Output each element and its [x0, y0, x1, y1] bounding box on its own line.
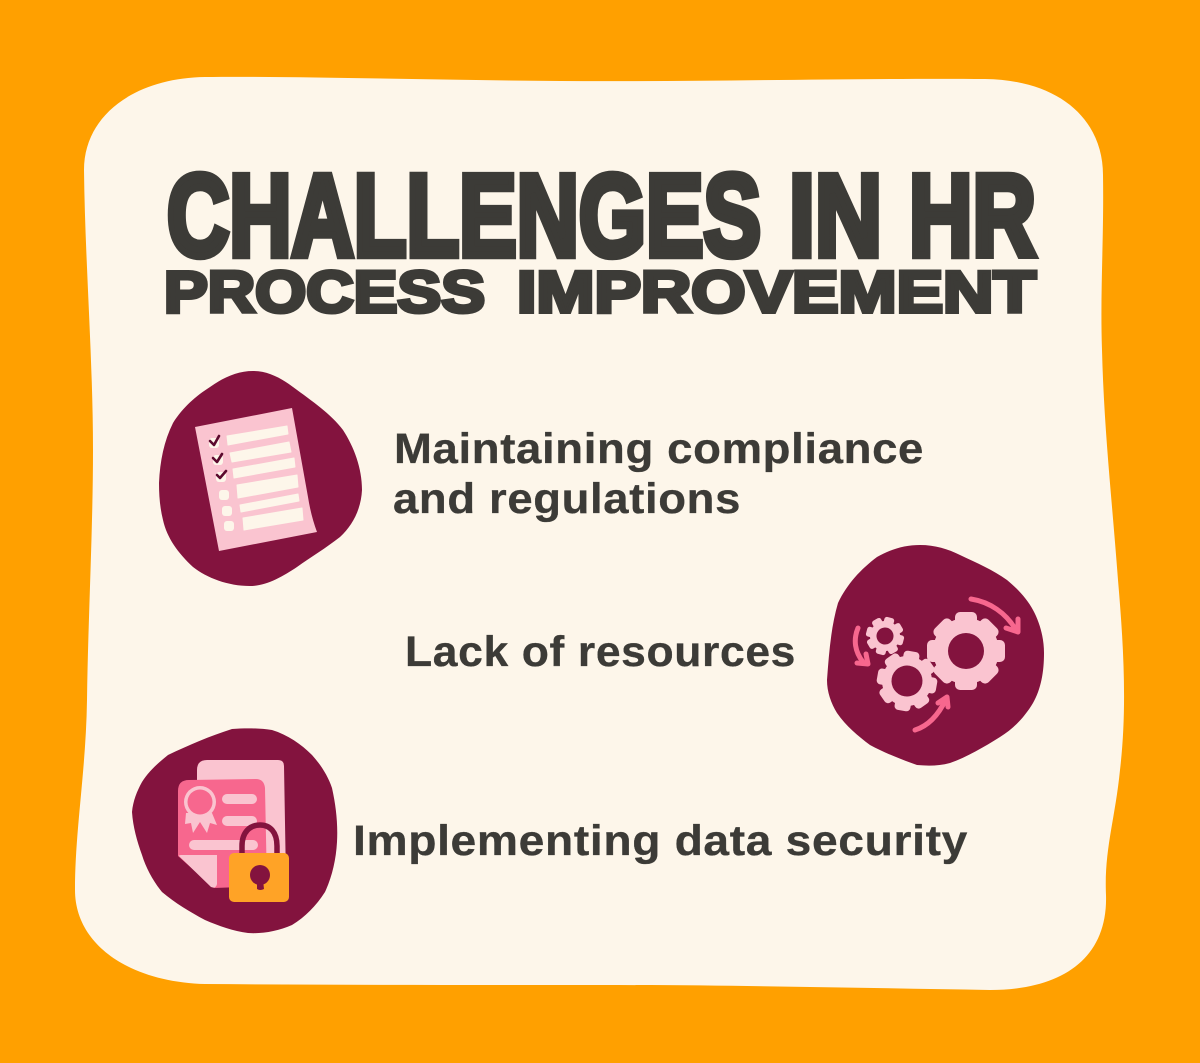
text: resources: Lack of resources [405, 628, 796, 676]
padlock body [229, 853, 289, 902]
blob [132, 728, 337, 933]
certificate lines [189, 794, 258, 850]
check marks [210, 436, 226, 478]
title line 1: IN [789, 150, 882, 280]
line 1: Maintaining compliance [394, 425, 924, 473]
keyhole [250, 865, 270, 890]
certificate page [178, 779, 267, 888]
line 2: and regulations [393, 475, 741, 523]
title line 2: PROCESS [164, 260, 485, 325]
icon: locked document [132, 728, 337, 933]
blob [827, 545, 1044, 766]
text rows [227, 426, 303, 530]
small gear [862, 613, 908, 659]
title line 1: HR [909, 150, 1036, 280]
icon: gears [827, 545, 1044, 766]
paper [195, 408, 317, 551]
title line 1: CHALLENGES [167, 150, 761, 280]
title line 2: IMPROVEMENT [517, 260, 1036, 325]
large gear [927, 612, 1005, 690]
back page [197, 760, 286, 884]
padlock shackle [242, 825, 277, 855]
check boxes [209, 438, 234, 531]
blob [159, 371, 362, 586]
text: compliance [393, 425, 924, 523]
panel: cream wavy card [75, 77, 1124, 990]
medal [184, 786, 217, 833]
icon: compliance checklist [159, 371, 362, 586]
medium gear [872, 646, 942, 716]
title [164, 150, 1036, 325]
title line 2 [164, 260, 1036, 325]
folded corner [179, 855, 217, 888]
rotation arrows [855, 599, 1018, 730]
text: data security: Implementing data security [353, 817, 968, 865]
